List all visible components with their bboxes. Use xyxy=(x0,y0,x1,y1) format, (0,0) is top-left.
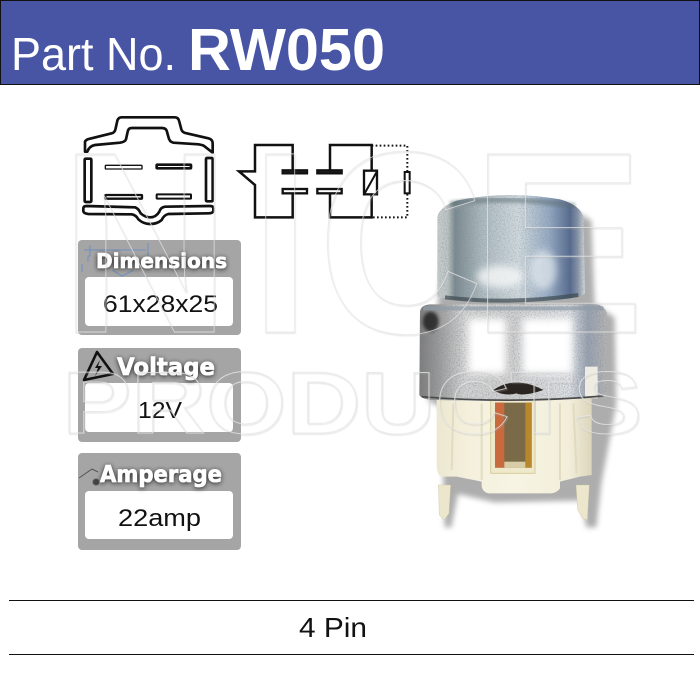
title: part number: RW050 xyxy=(188,17,385,83)
upper metal can xyxy=(437,195,585,302)
lower metal collar xyxy=(419,304,607,401)
connector pin diagram xyxy=(83,117,213,224)
terminal window xyxy=(491,400,535,473)
pin blades xyxy=(105,165,191,199)
title: part number: Part No. xyxy=(11,28,176,80)
drop shadow xyxy=(428,201,616,527)
watermark: NICE PRODUCTS: N xyxy=(60,98,230,387)
relay wiring schematic xyxy=(239,145,410,217)
side slots xyxy=(85,158,213,202)
watermark: NICE PRODUCTS: E xyxy=(470,98,645,387)
watermark: NICE PRODUCTS: PRODUCTS xyxy=(62,353,642,452)
watermark: NICE PRODUCTS xyxy=(60,98,645,452)
header banner xyxy=(0,0,700,84)
diode xyxy=(405,172,410,193)
pins xyxy=(438,485,451,520)
panel: dimensions xyxy=(78,240,241,335)
title: part number xyxy=(11,17,385,83)
plastic base xyxy=(437,398,592,520)
panel: voltage xyxy=(78,348,241,442)
value: 61x28x25 xyxy=(103,291,218,318)
icon: dimension sketch xyxy=(82,243,148,276)
pin count: 4 Pin xyxy=(299,612,367,643)
value: 22amp xyxy=(118,505,201,532)
icon: amperage sketch xyxy=(79,469,99,485)
icon: high-voltage triangle xyxy=(84,352,113,380)
watermark: NICE PRODUCTS: I xyxy=(252,98,308,387)
watermark: NICE PRODUCTS: C xyxy=(318,98,483,387)
heading: Amperage xyxy=(100,462,222,488)
value: 12V xyxy=(138,397,183,423)
heading: Dimensions xyxy=(96,249,227,273)
heading: Voltage xyxy=(117,353,215,381)
relay coil xyxy=(364,171,377,194)
product photo: relay xyxy=(419,195,616,527)
panel: amperage xyxy=(78,453,241,550)
